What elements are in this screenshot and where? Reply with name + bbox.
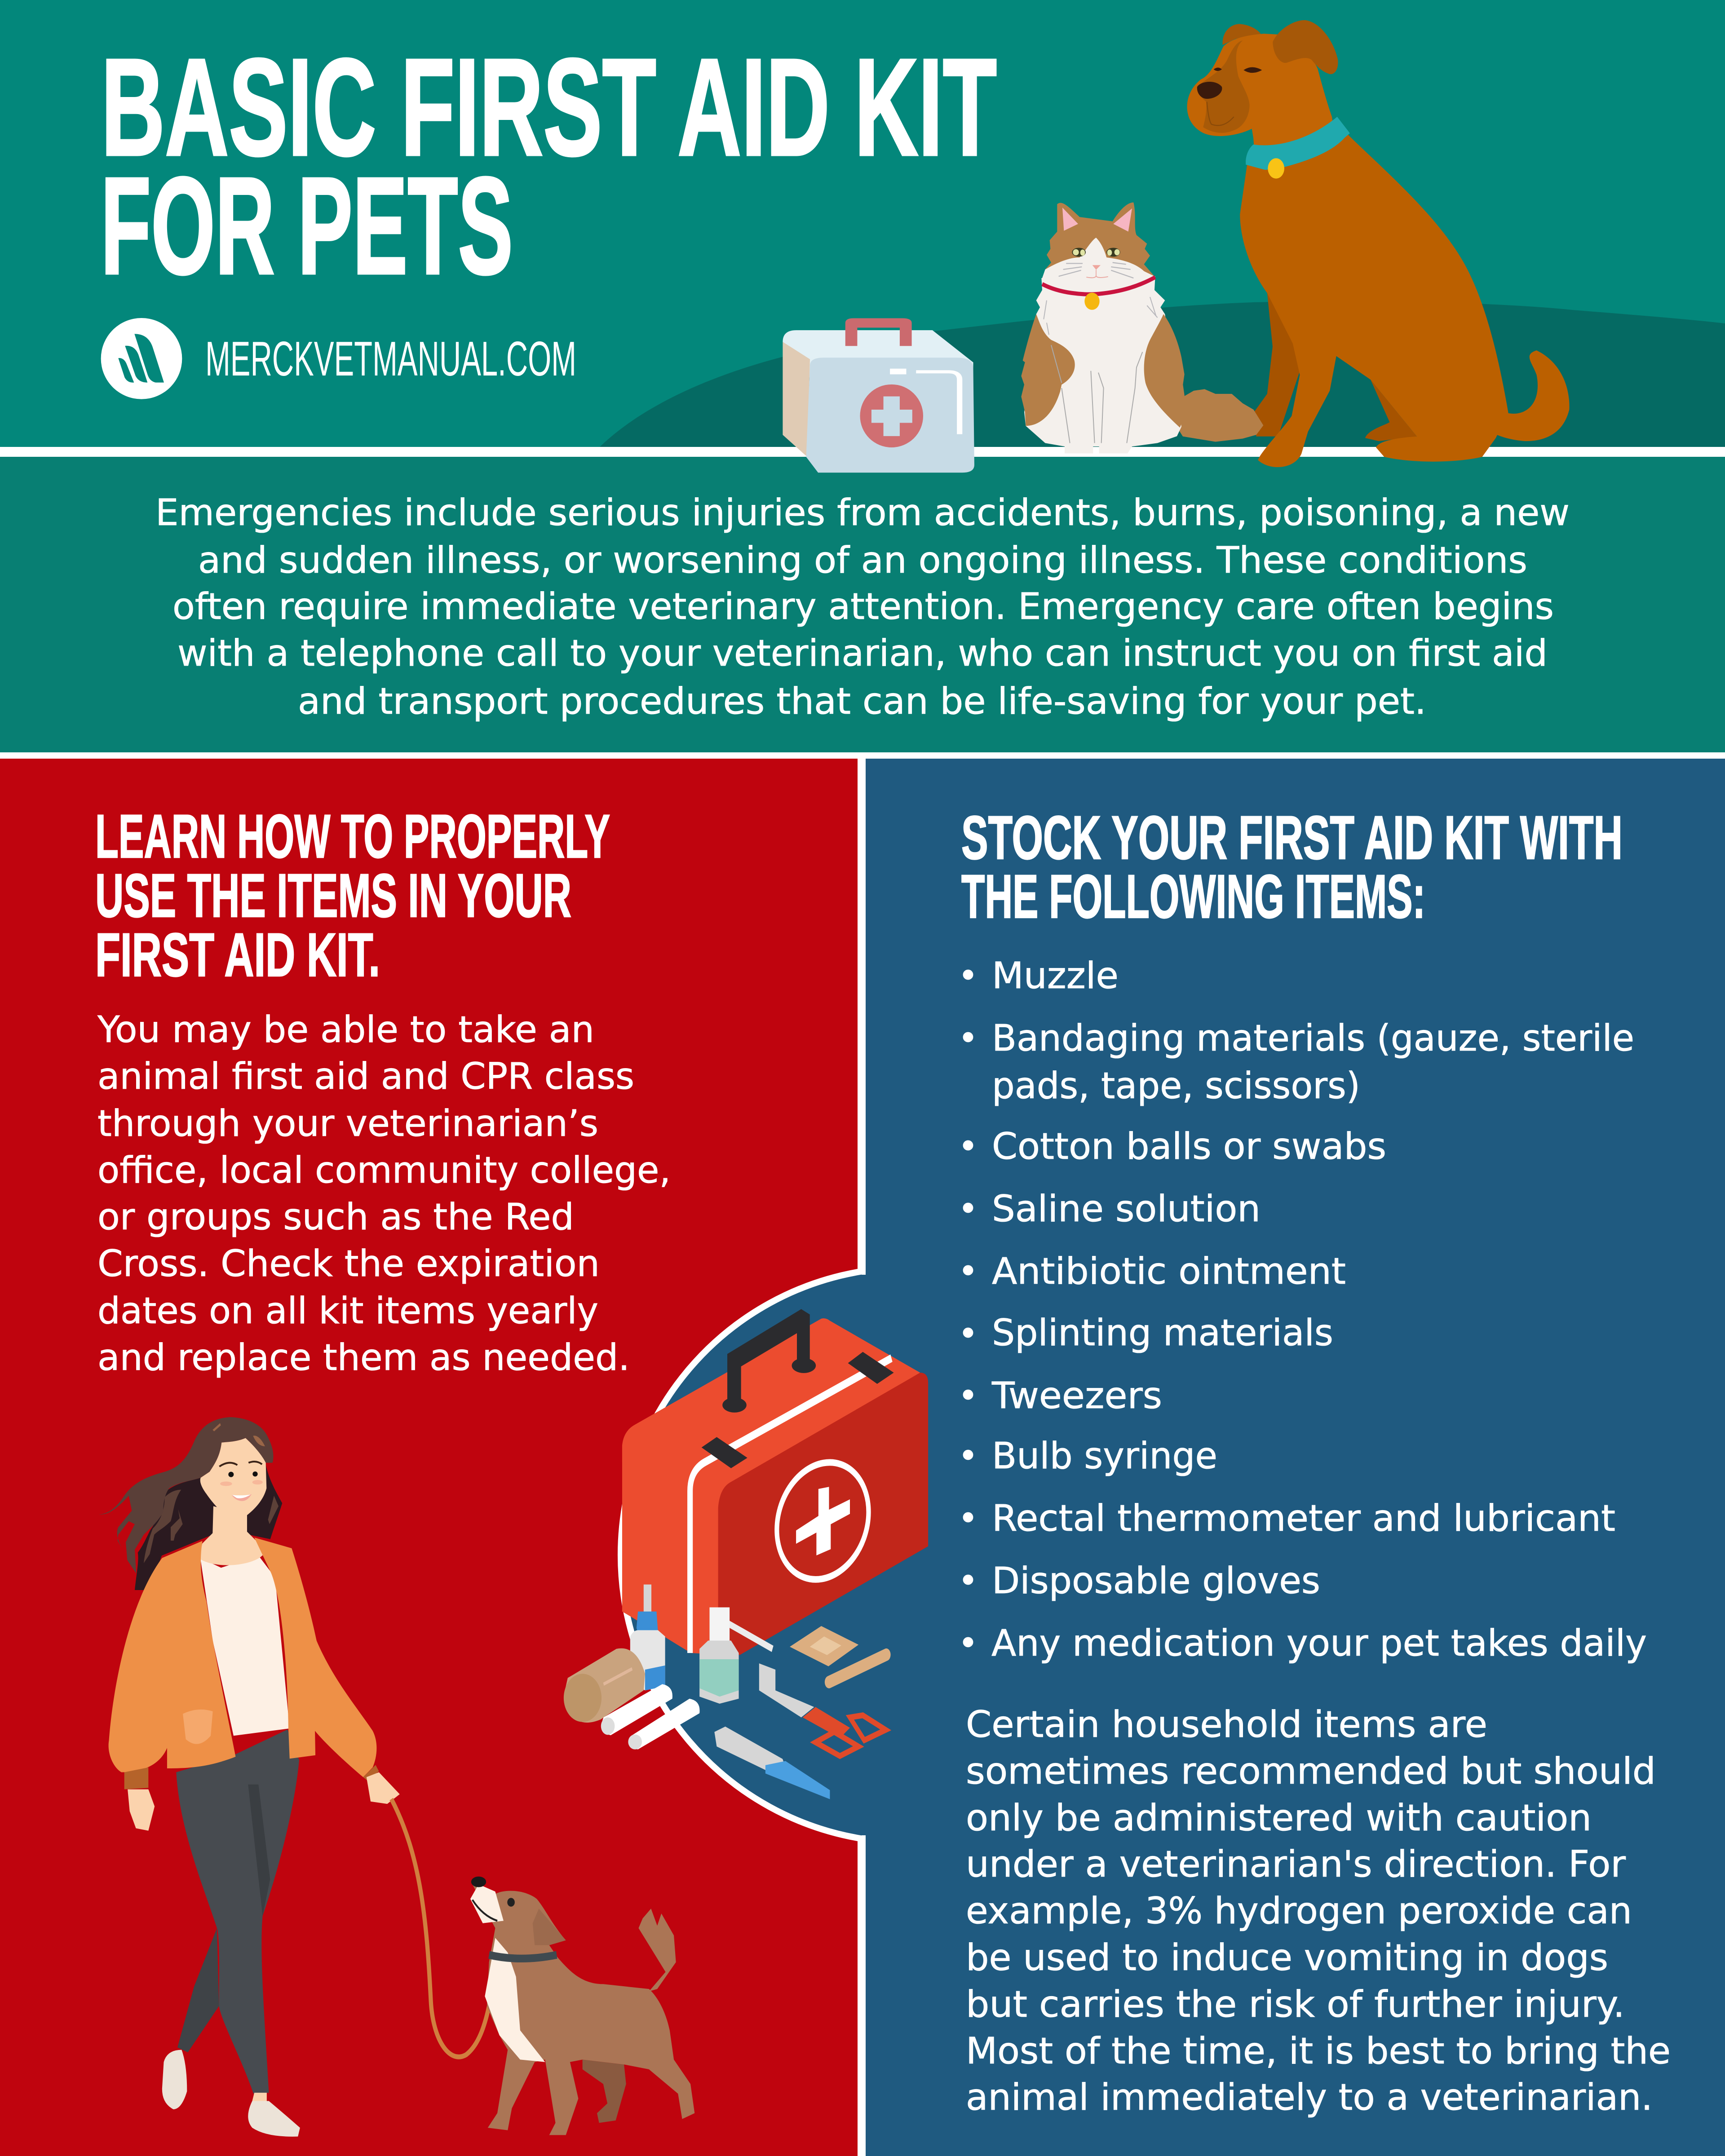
text block: left paragraph: or groups such as the Red <box>97 1196 574 1238</box>
icon: Merck logo <box>101 318 182 399</box>
bullet list of kit items: Muzzle <box>992 955 1119 997</box>
heading: learn how to use kit: USE THE ITEMS IN YOUR <box>95 862 571 930</box>
blue strip joining the circle bulge to the right panel <box>856 1275 867 1835</box>
kit: latches <box>702 1352 894 1468</box>
bullet list of kit items: Saline solution <box>992 1188 1261 1230</box>
kit: handle <box>722 1309 816 1413</box>
item: bottle <box>630 1585 665 1690</box>
illustration: cat <box>1021 203 1186 453</box>
text block: left paragraph: dates on all kit items yearly <box>97 1290 598 1332</box>
bullet list of kit items: Tweezers <box>991 1375 1162 1417</box>
item: spray bottle <box>699 1607 773 1704</box>
heading: learn how to use kit: LEARN HOW TO PROPERLY <box>95 802 610 871</box>
item: gauze roll <box>564 1648 645 1723</box>
heading: stock your kit <box>961 804 1623 931</box>
item: gauze pad and plaster <box>790 1626 886 1682</box>
text block: household items caution: Certain household items are <box>966 1704 1487 1746</box>
divider: section white bar <box>0 752 1725 759</box>
panel: header background <box>0 0 1725 449</box>
text block: left paragraph: and replace them as needed. <box>97 1337 630 1379</box>
text block: household items caution: under a veterinarian's direction. For <box>966 1843 1626 1886</box>
intro text: and sudden illness, or worsening of an ongoing illness. These conditions <box>198 539 1527 582</box>
title: FOR PETS <box>101 149 513 303</box>
bullet list of kit items: Cotton balls or swabs <box>992 1126 1386 1168</box>
intro text: Emergencies include serious injuries from accidents, burns, poisoning, a new <box>155 492 1570 534</box>
text block: household items caution: be used to induce vomiting in dogs <box>966 1937 1608 1979</box>
bullet list of kit items: Antibiotic ointment <box>992 1250 1346 1293</box>
bullet list of kit items: Disposable gloves <box>992 1560 1320 1602</box>
circle bulge behind kit <box>621 1271 862 1839</box>
hill behind pets <box>597 301 1725 449</box>
heading: learn how to use kit: FIRST AID KIT. <box>95 921 380 990</box>
panel: intro background <box>0 457 1725 753</box>
heading: learn how to use kit <box>95 802 610 990</box>
illustration: open red first aid kit and supplies <box>564 1309 928 1799</box>
bullet list of kit items: Any medication your pet takes daily <box>991 1622 1647 1665</box>
illustration: small first aid kit <box>783 318 974 473</box>
text block: left paragraph: Cross. Check the expiration <box>97 1243 600 1285</box>
item: scissors <box>759 1663 886 1756</box>
text block: household items caution <box>966 1704 1671 2119</box>
divider: header white bar <box>0 447 1725 457</box>
title: BASIC FIRST AID KIT <box>101 30 997 185</box>
illustration: large dog head and collar <box>1187 20 1350 179</box>
title <box>101 30 997 303</box>
text block: left paragraph <box>97 1009 671 1379</box>
illustration: cat tail <box>1172 389 1263 442</box>
bullet list of kit items: Splinting materials <box>992 1312 1333 1354</box>
kit: cross emblem <box>764 1441 882 1601</box>
bullet list of kit items: Bulb syringe <box>992 1435 1217 1477</box>
kit: lid top <box>622 1318 920 1495</box>
kit: left side <box>622 1445 728 1655</box>
intro text <box>155 492 1570 723</box>
text block: left paragraph: animal first aid and CPR class <box>97 1056 634 1098</box>
text block: left paragraph: through your veterinarian’s <box>97 1103 598 1145</box>
divider: vertical white line lower <box>858 1835 866 2156</box>
bullet list of kit items: Bandaging materials (gauze, sterile <box>992 1017 1634 1060</box>
text block: household items caution: sometimes recommended but should <box>966 1750 1656 1793</box>
illustration: small brown dog <box>470 1877 694 2135</box>
kit: white band <box>690 1358 891 1653</box>
item: thermometer <box>714 1727 830 1799</box>
kit: front face <box>718 1373 928 1655</box>
text block: household items caution: Most of the time, it is best to bring the <box>966 2030 1671 2072</box>
woman: face and neck <box>199 1438 266 1565</box>
panel: left red <box>0 758 858 2156</box>
website url: MERCKVETMANUAL.COM <box>205 331 576 386</box>
text block: left paragraph: You may be able to take an <box>97 1009 594 1051</box>
divider: vertical white line upper <box>858 758 866 1275</box>
illustration: large dog body <box>1240 126 1570 467</box>
intro text: and transport procedures that can be life-saving for your pet. <box>298 680 1426 723</box>
panel: right blue <box>866 758 1725 2156</box>
heading: stock your kit: THE FOLLOWING ITEMS: <box>961 862 1425 931</box>
woman: jacket, hands and leash <box>109 1537 489 2057</box>
bullet list of kit items: pads, tape, scissors) <box>992 1065 1360 1107</box>
text block: left paragraph: office, local community college, <box>97 1149 671 1192</box>
bullet list of kit items <box>963 955 1647 1665</box>
intro text: often require immediate veterinary attention. Emergency care often begins <box>172 586 1554 628</box>
bullet list of kit items: Rectal thermometer and lubricant <box>992 1498 1615 1540</box>
text block: household items caution: but carries the risk of further injury. <box>966 1984 1625 2026</box>
woman: hair <box>99 1417 282 1590</box>
item: bandage rolls <box>601 1684 700 1750</box>
text block: household items caution: only be administered with caution <box>966 1797 1592 1839</box>
woman: trousers and shoes <box>162 1555 300 2137</box>
text block: household items caution: example, 3% hydrogen peroxide can <box>966 1890 1632 1932</box>
text block: household items caution: animal immediately to a veterinarian. <box>966 2076 1653 2119</box>
intro text: with a telephone call to your veterinarian, who can instruct you on first aid <box>177 632 1548 675</box>
